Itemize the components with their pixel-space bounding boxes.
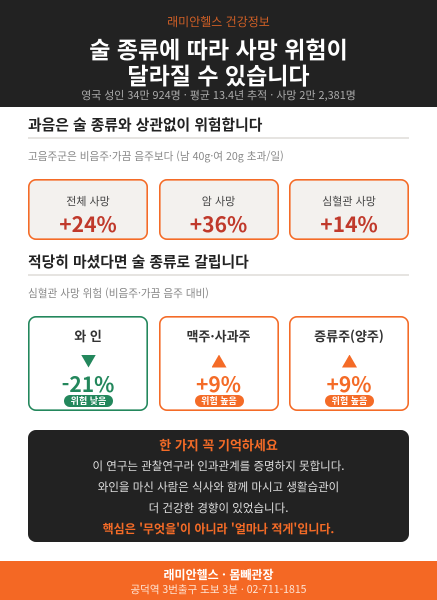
badge: lower risk <box>64 395 113 407</box>
badge: higher risk <box>325 395 374 407</box>
clinic name: 래미안헬스 · 몸빼관장 <box>164 566 274 583</box>
callout body: 이 연구는 관찰연구라 인과관계를 증명하지 못합니다. <box>92 458 345 474</box>
callout heading: 한 가지 꼭 기억하세요 <box>159 435 278 454</box>
icon: up triangle <box>212 354 226 368</box>
callout panel <box>28 430 409 542</box>
icon: down triangle <box>81 354 96 368</box>
card: beer and cider <box>158 316 278 411</box>
label: 증류주(양주) <box>314 326 384 344</box>
value: +14% <box>320 208 378 238</box>
title: 술 종류에 따라 사망 위험이 <box>89 31 348 65</box>
callout body: 더 건강한 경향이 있었습니다. <box>149 500 288 516</box>
title: 달라질 수 있습니다 <box>127 57 310 91</box>
note: comparison basis: 심혈관 사망 위험 (비음주·가끔 음주 대비) <box>28 286 209 301</box>
address and phone: 공덕역 3번출구 도보 3분 · 02-711-1815 <box>130 582 306 597</box>
heading: heavy drinking: 과음은 술 종류와 상관없이 위험합니다 <box>28 114 262 135</box>
card: overall death <box>28 179 148 240</box>
badge: higher risk: 위험 높음 <box>201 394 237 407</box>
callout body <box>92 458 345 516</box>
title <box>89 31 348 91</box>
value: +36% <box>190 208 247 238</box>
badge: higher risk <box>194 395 244 407</box>
callout body: 와인을 마신 사람은 식사와 함께 마시고 생활습관이 <box>98 478 339 494</box>
value: +9% <box>196 368 241 398</box>
card: cardiovascular death <box>289 179 409 240</box>
card: cancer death <box>158 179 278 240</box>
value: +24% <box>59 208 117 238</box>
value: -21% <box>62 368 114 398</box>
label: 심혈관 사망 <box>322 192 376 208</box>
label: 암 사망 <box>202 192 235 208</box>
badge: higher risk: 위험 높음 <box>332 394 367 407</box>
label: 전체 사망 <box>66 192 110 208</box>
callout key message: 핵심은 '무엇을'이 아니라 '얼마나 적게'입니다. <box>103 520 334 537</box>
value: +9% <box>326 368 372 398</box>
label: 와 인 <box>74 326 102 344</box>
brand label: 래미안헬스 건강정보 <box>167 13 270 30</box>
note: heavy drinking definition: 고음주군은 비음주·가끔 음주보다 (남 40g·여 20g 초과/일) <box>28 149 284 164</box>
label: 맥주·사과주 <box>186 326 251 344</box>
badge: lower risk: 위험 낮음 <box>71 394 106 407</box>
icon: up triangle <box>342 354 357 368</box>
study summary: 영국 성인 34만 924명 · 평균 13.4년 추적 · 사망 2만 2,381명 <box>81 86 356 102</box>
footer band <box>0 561 437 600</box>
heading: moderate drinking: 적당히 마셨다면 술 종류로 갈립니다 <box>28 251 249 272</box>
header band <box>0 0 437 106</box>
card: spirits <box>289 316 409 411</box>
card: wine <box>28 316 148 411</box>
